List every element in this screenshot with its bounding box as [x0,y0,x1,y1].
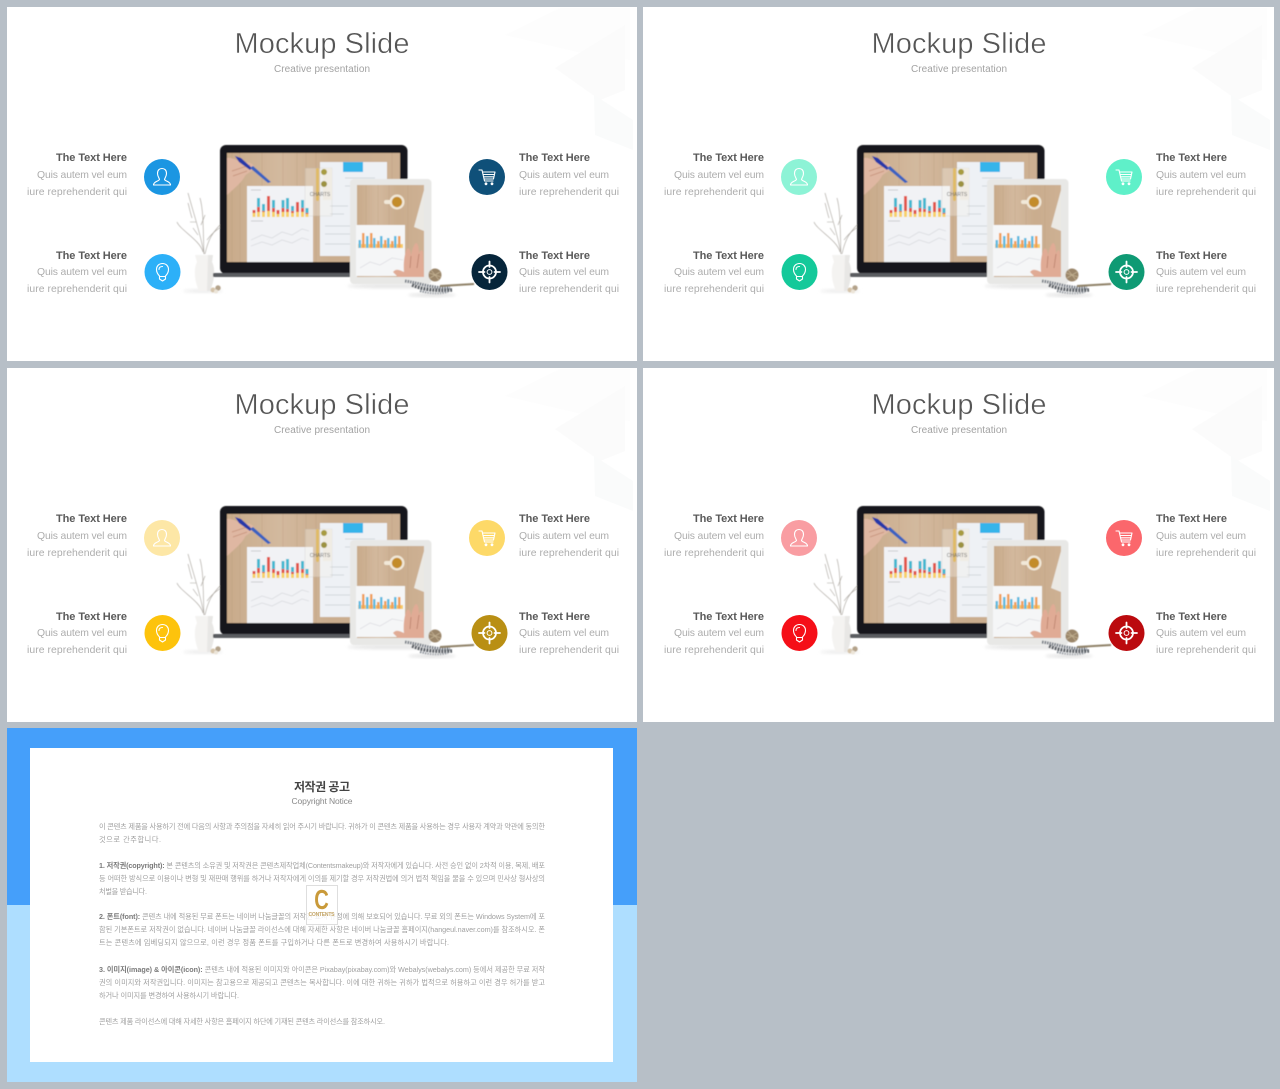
title: Mockup Slide [234,28,410,60]
text block: top right [519,513,619,559]
icon: cart [1106,520,1142,556]
laptop and tablet mockup [814,506,1111,658]
text block: bottom right [519,611,619,656]
panel: mockup slide blue [7,7,637,361]
text block: top left: Quis autem vel eum [674,531,764,542]
notice section 3: 3. 이미지(image) & 아이콘(icon): 콘텐츠 내에 적용된 이미지와 아이콘은 Pixabay(pixabay.com)와 Webalys(webalys.com) 등에서 제공한 무료 저작 [99,965,545,974]
text block: top right: iure reprehenderit qui [519,548,619,559]
text block: bottom left [664,250,764,295]
text block: bottom right: iure reprehenderit qui [1156,645,1256,656]
icon: target [1108,254,1144,290]
watermark logo [306,885,338,924]
text block: top left: The Text Here [693,152,764,164]
text block: bottom right: iure reprehenderit qui [1156,284,1256,295]
text block: bottom right [1156,611,1256,656]
text block: top left [27,513,127,559]
icon: light bulb [782,615,818,651]
panel: copyright notice [7,728,637,1082]
text block: bottom left: The Text Here [56,611,127,623]
text block: bottom left: iure reprehenderit qui [664,645,764,656]
text block: top right: Quis autem vel eum [519,170,609,181]
notice section 2: 함된 기본폰트로 저작권이 없습니다. 네이버 나눔글꼴 라이선스에 대해 자세한 사항은 네이버 나눔글꼴 홈페이지(hangeul.naver.com)를 참조하시오. 폰 [99,925,545,934]
notice heading: 저작권 공고 [294,779,350,794]
icon: light bulb [144,615,180,651]
text block: top left [27,152,127,198]
text block: top right: The Text Here [519,152,590,164]
icon: user [781,159,817,195]
text block: bottom left: The Text Here [56,250,127,262]
text block: bottom left: iure reprehenderit qui [27,284,127,295]
notice subtitle: Copyright Notice [292,796,353,806]
notice section 3 [99,965,545,1000]
panel: mockup slide yellow [7,368,637,722]
text block: top left [664,152,764,198]
text block: bottom right [519,250,619,295]
text block: bottom left: The Text Here [693,611,764,623]
text block: top right [1156,513,1256,559]
subtitle: Creative presentation [274,64,370,75]
icon: user [144,159,180,195]
text block: bottom left [664,611,764,656]
watermark logo: CONTENTS [308,912,335,918]
icon: user [144,520,180,556]
icon: target [1108,615,1144,651]
text block: bottom left: Quis autem vel eum [37,628,127,639]
text block: top right [1156,152,1256,198]
text block: bottom left: The Text Here [693,250,764,262]
notice intro: 이 콘텐츠 제품을 사용하기 전에 다음의 사항과 주의점을 자세히 읽어 주시기 바랍니다. 귀하가 이 콘텐츠 제품을 사용하는 경우 사용자 계약과 약관에 동의한 [99,822,545,831]
subtitle: Creative presentation [274,425,370,436]
text block: top right: The Text Here [519,513,590,525]
icon: cart [469,520,505,556]
text block: top right: The Text Here [1156,152,1227,164]
title: Mockup Slide [234,389,410,421]
icon: user [781,520,817,556]
notice section 1: 등 어떠한 방식으로 이용이나 변형 및 재판매 행위를 하거나 저작자에게 이의를 제기할 경우 저작권법에 의거 법적 책임을 물을 수 있으며 민사상 형사상의 [99,874,545,883]
text block: top right [519,152,619,198]
text block: bottom left [27,611,127,656]
panel: mockup slide green [643,7,1274,361]
text block: bottom left: Quis autem vel eum [37,267,127,278]
laptop and tablet mockup [177,145,474,296]
watermark logo: C [314,885,329,916]
notice section 1 [99,861,545,896]
notice intro: 것으로 간주합니다. [99,835,161,844]
text block: bottom right: The Text Here [1156,611,1227,623]
notice section 1: 처벌을 받습니다. [99,887,147,896]
text block: bottom right: iure reprehenderit qui [519,284,619,295]
text block: bottom left [27,250,127,295]
notice section 3: 권의 이미지와 저작권입니다. 이미지는 참고용으로 제공되고 콘텐츠는 복사합니다. 이에 대한 귀하는 귀하가 법적으로 허용하고 이런 경우 허가를 받고 [99,978,545,987]
text block: bottom right: Quis autem vel eum [519,628,609,639]
text block: top left: Quis autem vel eum [674,170,764,181]
text block: bottom right: Quis autem vel eum [1156,267,1246,278]
text block: bottom right [1156,250,1256,295]
icon: cart [1106,159,1142,195]
text block: top right: Quis autem vel eum [1156,170,1246,181]
text block: top left: The Text Here [693,513,764,525]
title: Mockup Slide [872,28,1046,60]
text block: top left: iure reprehenderit qui [27,548,127,559]
text block: bottom right: Quis autem vel eum [519,267,609,278]
text block: top right: The Text Here [1156,513,1227,525]
text block: top left: iure reprehenderit qui [664,187,764,198]
text block: top right: iure reprehenderit qui [519,187,619,198]
text block: bottom right: Quis autem vel eum [1156,628,1246,639]
text block: top right: Quis autem vel eum [1156,531,1246,542]
text block: top left: iure reprehenderit qui [27,187,127,198]
title: Mockup Slide [872,389,1046,421]
icon: light bulb [782,254,818,290]
text block: top left: The Text Here [56,513,127,525]
notice section 1: 1. 저작권(copyright): 본 콘텐츠의 소유권 및 저작권은 콘텐츠제작업체(Contentsmakeup)와 저작자에게 있습니다. 사전 승인 없이 2차적 이용, 복제, 배포 [99,861,545,870]
text block: top right: iure reprehenderit qui [1156,187,1256,198]
notice section 2: 트는 콘텐츠에 임베딩되지 않으므로, 이런 경우 정품 폰트를 구입하거나 다른 폰트로 변경하여 사용하시기 바랍니다. [99,938,449,947]
notice intro [99,822,545,844]
subtitle: Creative presentation [911,64,1007,75]
text block: top right: Quis autem vel eum [519,531,609,542]
notice section 3: 하거나 이미지를 변경하여 사용하시기 바랍니다. [99,991,239,1000]
text block: bottom right: The Text Here [519,250,590,262]
text block: top left [664,513,764,559]
icon: light bulb [144,254,180,290]
text block: top left: Quis autem vel eum [37,531,127,542]
text block: top left: The Text Here [56,152,127,164]
text block: bottom right: iure reprehenderit qui [519,645,619,656]
subtitle: Creative presentation [911,425,1007,436]
notice footer: 콘텐츠 제품 라이선스에 대해 자세한 사항은 홈페이지 하단에 기재된 콘텐츠 라이선스를 참조하시오. [99,1017,385,1026]
text block: bottom left: iure reprehenderit qui [27,645,127,656]
laptop and tablet mockup [177,506,474,658]
text block: bottom left: iure reprehenderit qui [664,284,764,295]
notice section 2 [99,912,545,947]
text block: bottom left: Quis autem vel eum [674,628,764,639]
text block: top right: iure reprehenderit qui [1156,548,1256,559]
icon: target [472,254,508,290]
icon: target [472,615,508,651]
text block: top left: Quis autem vel eum [37,170,127,181]
text block: bottom left: Quis autem vel eum [674,267,764,278]
text block: bottom right: The Text Here [1156,250,1227,262]
laptop and tablet mockup [814,145,1111,296]
notice section 2: 2. 폰트(font): 콘텐츠 내에 적용된 무료 폰트는 네이버 나눔글꼴의 저작권 표시 규정에 의해 보호되어 있습니다. 무료 외의 폰트는 Windows System에 포 [99,912,545,921]
text block: bottom right: The Text Here [519,611,590,623]
text block: top left: iure reprehenderit qui [664,548,764,559]
icon: cart [469,159,505,195]
panel: mockup slide red [643,368,1274,722]
